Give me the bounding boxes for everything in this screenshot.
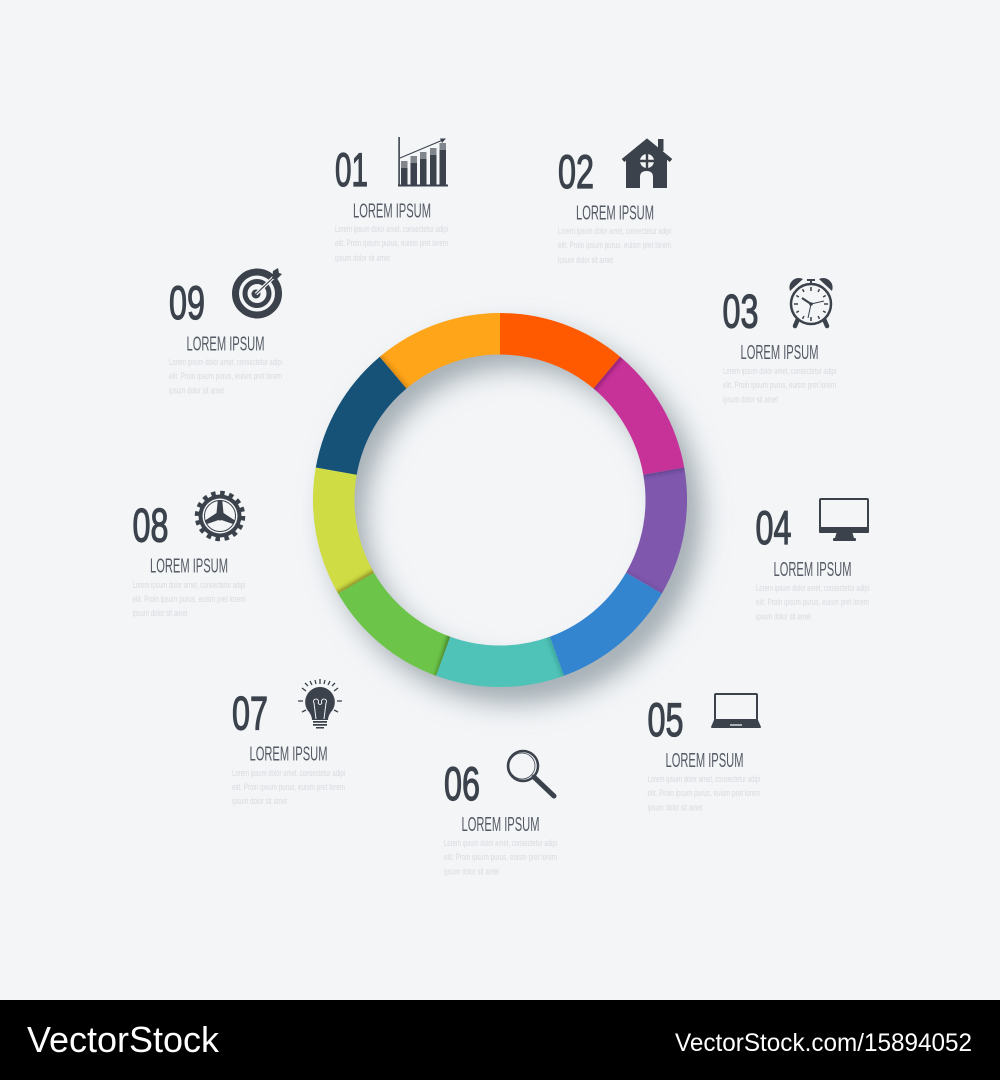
title: LOREM IPSUM <box>774 558 852 581</box>
body text <box>444 838 557 878</box>
body text <box>723 366 836 406</box>
segment 06: green <box>338 573 450 676</box>
body text: elit. Proin ipsum purus, euism pret lorem <box>169 371 282 382</box>
body text: elit. Proin ipsum purus, euism pret lorem <box>335 238 448 249</box>
title: LOREM IPSUM <box>186 332 264 356</box>
number 07: 07 <box>232 686 268 740</box>
icon: alarm clock <box>789 278 833 326</box>
body text: elit. Proin ipsum purus, euism pret lorem <box>558 240 671 251</box>
icon: gear <box>197 493 243 539</box>
icon: bar chart <box>398 137 448 186</box>
body text: ipsum dolor sit amet <box>558 255 613 266</box>
body text: Lorem ipsum dolor amet, consectetur adipi <box>132 580 246 591</box>
segment 04: blue <box>550 573 662 676</box>
number 03: 03 <box>722 284 758 338</box>
block 05 <box>648 693 761 814</box>
title: LOREM IPSUM <box>666 749 744 772</box>
ring drop shadow <box>346 348 682 684</box>
body text: ipsum dolor sit amet <box>444 866 499 878</box>
block 07 <box>232 679 345 807</box>
segment 03: purple <box>626 468 687 594</box>
title: LOREM IPSUM <box>250 742 328 766</box>
body text: ipsum dolor sit amet <box>756 612 811 622</box>
segment 07: yellow <box>313 468 374 594</box>
body text: Lorem ipsum dolor amet, consectetur adipi <box>232 768 345 779</box>
title: LOREM IPSUM <box>150 554 228 578</box>
body text <box>232 768 345 807</box>
body text <box>335 224 448 264</box>
body text: Lorem ipsum dolor amet, consectetur adipi <box>169 357 282 368</box>
number 06: 06 <box>444 757 480 810</box>
body text: ipsum dolor sit amet <box>335 253 390 264</box>
block 03 <box>722 278 836 406</box>
segment 01: orange <box>500 313 620 388</box>
body text: elit. Proin ipsum purus, euism pret lorem <box>648 788 761 799</box>
icon: laptop <box>711 694 761 728</box>
body text: Lorem ipsum dolor amet, consectetur adipi <box>558 226 671 237</box>
body text: Lorem ipsum dolor amet, consectetur adipi <box>756 583 869 594</box>
icon: house <box>623 139 671 188</box>
segment 02: magenta <box>594 357 684 475</box>
footer image id: VectorStock.com/15894052 <box>675 1029 972 1057</box>
block 06 <box>444 751 557 878</box>
icon: monitor <box>819 499 869 541</box>
icon: light bulb <box>298 679 342 728</box>
number 01: 01 <box>335 143 368 196</box>
title: LOREM IPSUM <box>576 202 654 224</box>
segment 08: navy <box>316 357 406 475</box>
body text: elit. Proin ipsum purus, euism pret lorem <box>132 594 246 605</box>
title: LOREM IPSUM <box>462 813 540 836</box>
body text <box>132 580 246 619</box>
footer bar <box>0 1000 1000 1080</box>
block 08 <box>132 493 246 619</box>
donut ring chart <box>313 308 689 687</box>
block 09 <box>169 268 282 396</box>
body text: elit. Proin ipsum purus, euism pret lorem <box>444 852 557 863</box>
icon: target with arrow <box>236 268 282 315</box>
icon: magnifying glass <box>508 751 554 796</box>
block 01 <box>335 137 448 264</box>
body text: ipsum dolor sit amet <box>169 386 224 396</box>
body text: Lorem ipsum dolor amet, consectetur adipi <box>723 366 836 377</box>
block 04 <box>756 499 869 622</box>
body text <box>169 357 282 396</box>
body text: Lorem ipsum dolor amet, consectetur adipi <box>648 774 760 785</box>
body text: ipsum dolor sit amet <box>232 796 287 807</box>
number 08: 08 <box>132 498 168 552</box>
body text: ipsum dolor sit amet <box>648 802 703 814</box>
body text <box>756 583 869 622</box>
segment 05: teal <box>436 637 564 687</box>
number 02: 02 <box>558 145 594 198</box>
body text <box>558 226 671 266</box>
body text <box>648 774 761 814</box>
body text: Lorem ipsum dolor amet, consectetur adipi <box>335 224 448 235</box>
title: LOREM IPSUM <box>740 341 818 364</box>
body text: ipsum dolor sit amet <box>723 394 778 406</box>
body text: Lorem ipsum dolor amet, consectetur adipi <box>444 838 557 849</box>
block 02 <box>558 139 671 266</box>
number 09: 09 <box>169 276 205 329</box>
title: LOREM IPSUM <box>353 200 431 222</box>
number 05: 05 <box>648 693 684 746</box>
body text: elit. Proin ipsum purus, euism pret lorem <box>232 782 345 793</box>
number 04: 04 <box>756 501 792 554</box>
body text: elit. Proin ipsum purus, euism pret lorem <box>723 380 836 391</box>
footer logo text: VectorStock <box>27 1019 220 1060</box>
body text: ipsum dolor sit amet <box>132 608 188 619</box>
body text: elit. Proin ipsum purus, euism pret lorem <box>756 597 869 608</box>
segment 09: amber <box>380 313 500 388</box>
